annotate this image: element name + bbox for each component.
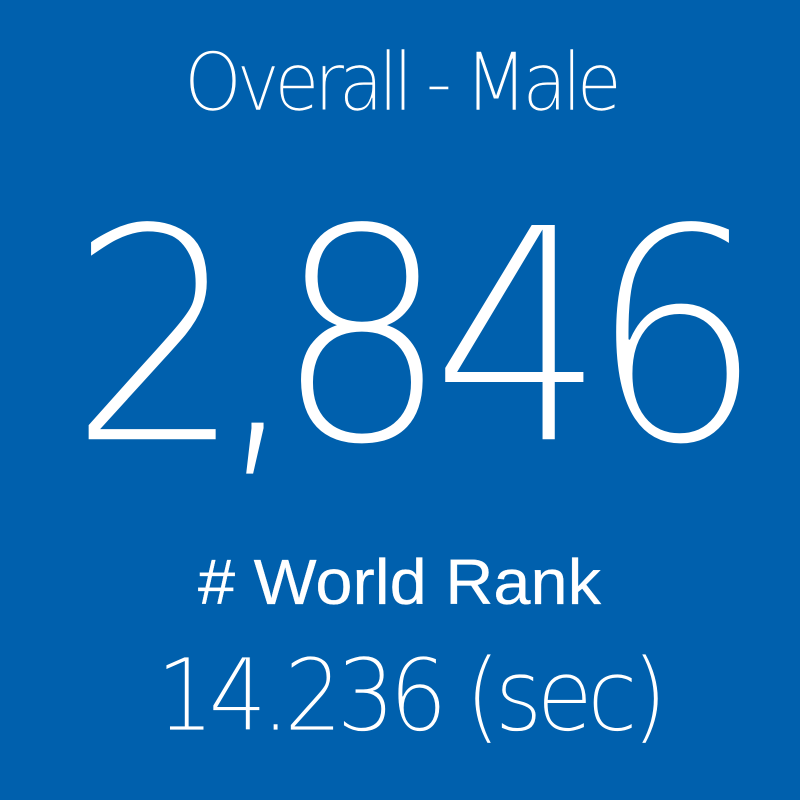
big number: rank: 2,846 xyxy=(69,167,764,510)
title: Overall - Male xyxy=(184,37,622,130)
time value: 14.236 (sec) xyxy=(156,637,668,754)
label: world rank: # World Rank xyxy=(198,546,602,618)
